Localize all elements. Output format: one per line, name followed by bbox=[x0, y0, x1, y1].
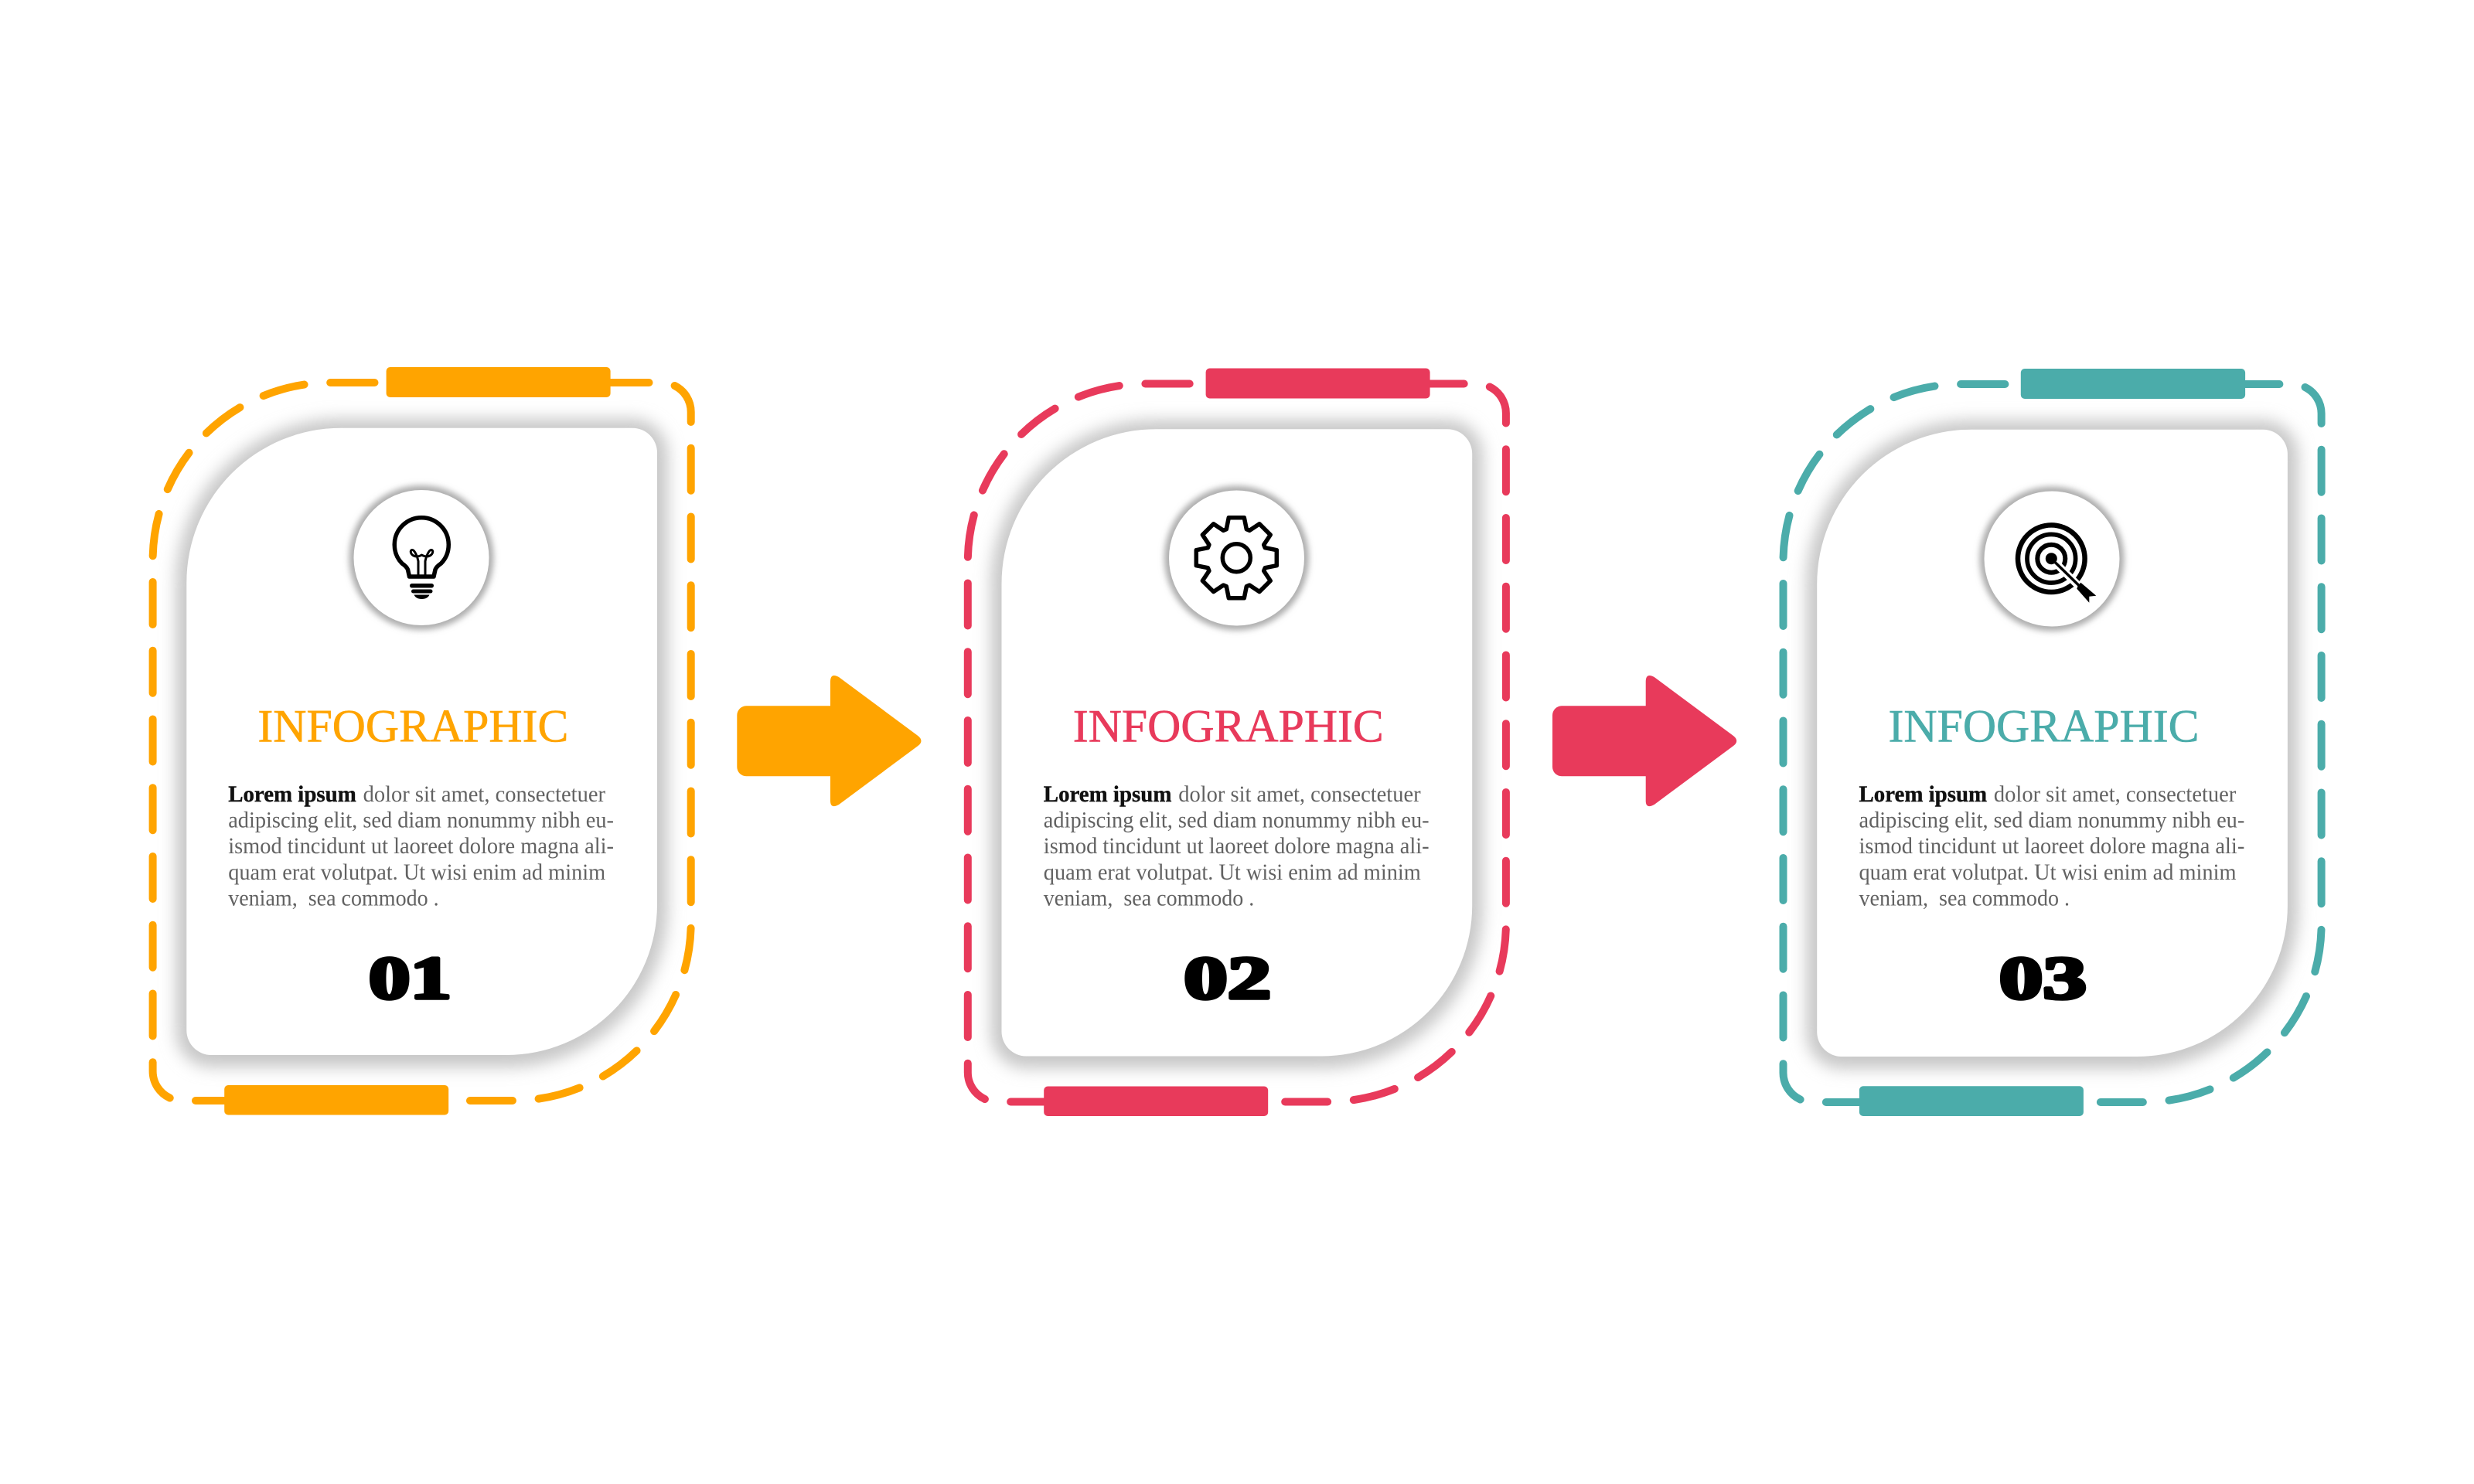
white card bbox=[186, 428, 657, 1055]
step number: 03 bbox=[1999, 945, 2087, 1011]
heading: INFOGRAPHIC bbox=[1888, 700, 2199, 751]
card shadow bbox=[186, 430, 657, 1057]
top accent bar bbox=[1206, 368, 1430, 399]
body text bbox=[1859, 781, 2244, 910]
body text: veniam, sea commodo . bbox=[1859, 886, 2070, 910]
body text: quam erat volutpat. Ut wisi enim ad minim bbox=[1044, 859, 1421, 885]
body text: dolor sit amet, consectetuer bbox=[1994, 781, 2236, 807]
body text: ismod tincidunt ut laoreet dolore magna ali- bbox=[1859, 833, 2244, 859]
body text: Lorem ipsum bbox=[1859, 781, 1987, 807]
bottom accent bar bbox=[1859, 1086, 2084, 1116]
dashed outline: step 3 bbox=[1783, 384, 2322, 1102]
body text: adipiscing elit, sed diam nonummy nibh eu- bbox=[1859, 807, 2244, 833]
icon badge: target with arrow bbox=[1979, 487, 2125, 631]
body text: quam erat volutpat. Ut wisi enim ad minim bbox=[1859, 859, 2236, 885]
card shadow bbox=[1817, 431, 2288, 1058]
heading: INFOGRAPHIC bbox=[1073, 700, 1384, 751]
card shadow bbox=[1002, 431, 1472, 1057]
heading: INFOGRAPHIC bbox=[257, 700, 568, 751]
dashed outline: step 1 bbox=[153, 383, 691, 1101]
panel: step 1 bbox=[153, 367, 691, 1115]
arrow: step 2 to step 3 bbox=[1552, 676, 1736, 806]
body text: dolor sit amet, consectetuer bbox=[1178, 781, 1421, 807]
dashed outline: step 2 bbox=[968, 383, 1506, 1102]
bottom accent bar bbox=[224, 1085, 448, 1115]
panel: step 3 bbox=[1783, 369, 2322, 1116]
body text: ismod tincidunt ut laoreet dolore magna ali- bbox=[228, 833, 614, 859]
icon badge: gear bbox=[1164, 485, 1309, 631]
white card bbox=[1817, 430, 2288, 1057]
body text: adipiscing elit, sed diam nonummy nibh eu- bbox=[1044, 807, 1430, 833]
body text: veniam, sea commodo . bbox=[228, 886, 439, 910]
body text: quam erat volutpat. Ut wisi enim ad minim bbox=[228, 859, 605, 885]
step number: 02 bbox=[1184, 945, 1271, 1011]
body text: ismod tincidunt ut laoreet dolore magna ali- bbox=[1044, 833, 1430, 859]
panel: step 2 bbox=[968, 368, 1506, 1116]
top accent bar bbox=[387, 367, 611, 397]
icon badge: light bulb bbox=[349, 485, 493, 630]
body text: veniam, sea commodo . bbox=[1044, 886, 1254, 910]
arrow: step 1 to step 2 bbox=[737, 676, 922, 806]
body text: Lorem ipsum bbox=[228, 781, 356, 807]
body text: adipiscing elit, sed diam nonummy nibh eu- bbox=[228, 807, 614, 833]
bottom accent bar bbox=[1044, 1087, 1268, 1116]
body text bbox=[1044, 781, 1430, 910]
top accent bar bbox=[2021, 369, 2245, 399]
body text bbox=[228, 781, 614, 910]
body text: Lorem ipsum bbox=[1044, 781, 1171, 807]
white card bbox=[1002, 429, 1472, 1056]
step number: 01 bbox=[369, 945, 452, 1011]
body text: dolor sit amet, consectetuer bbox=[363, 781, 605, 807]
